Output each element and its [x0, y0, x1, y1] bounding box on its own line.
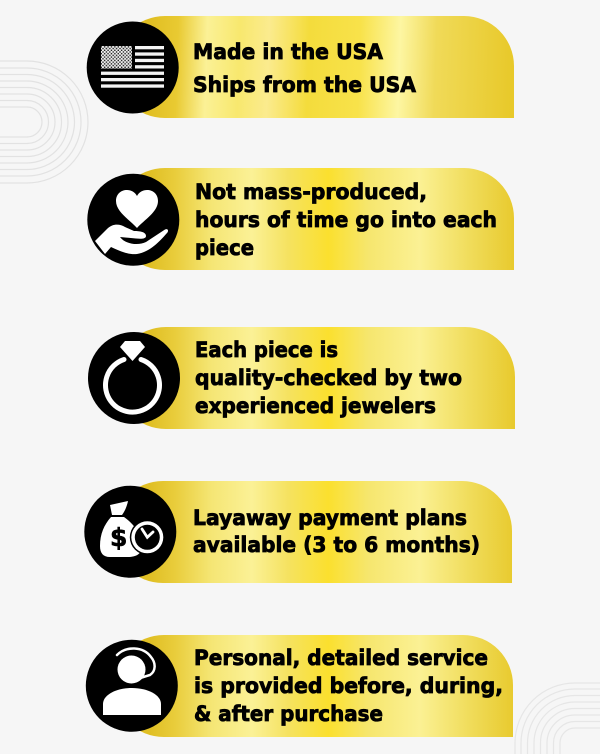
text: layaway: Layaway payment plans — [193, 506, 467, 530]
text: layaway: available (3 to 6 months) — [193, 533, 480, 557]
text: personal service: is provided before, during, — [194, 674, 503, 698]
text: quality-checked — [195, 338, 462, 418]
gold banner 3 — [115, 327, 515, 429]
text: personal service: Personal, detailed service — [194, 646, 488, 670]
text: made in the USA: Made in the USA — [193, 40, 384, 64]
text: layaway — [193, 506, 480, 557]
panel: personal service — [86, 635, 513, 737]
panel: quality-checked — [88, 327, 515, 429]
gold banner 2 — [114, 168, 514, 270]
text: not mass-produced: hours of time go into each — [195, 208, 497, 232]
text: made in the USA: Ships from the USA — [193, 73, 417, 97]
gold banner 1 — [114, 16, 514, 118]
icon: money bag and clock — [84, 486, 176, 578]
icon: heart in hand — [87, 174, 179, 266]
decorative rings: bottom right — [515, 683, 600, 754]
text: quality-checked: experienced jewelers — [195, 394, 436, 418]
gold banner 5 — [113, 635, 513, 737]
icon: money bag and clock: $ — [110, 523, 127, 552]
gold banner 4 — [112, 481, 512, 583]
icon: diamond ring — [88, 332, 180, 424]
text: not mass-produced: Not mass-produced, — [195, 180, 427, 204]
text: not mass-produced — [195, 180, 497, 260]
panel: not mass-produced — [87, 168, 514, 270]
text: personal service: & after purchase — [194, 702, 383, 726]
icon: person with headset — [86, 640, 178, 732]
text: quality-checked: Each piece is — [195, 338, 338, 362]
text: made in the USA — [193, 40, 417, 97]
text: not mass-produced: piece — [195, 236, 254, 260]
panel: made in the USA — [87, 16, 514, 118]
panel: layaway — [84, 481, 512, 583]
text: personal service — [194, 646, 503, 726]
text: quality-checked: quality-checked by two — [195, 366, 462, 390]
icon: US flag — [87, 22, 179, 114]
decorative rings: left — [0, 61, 88, 183]
